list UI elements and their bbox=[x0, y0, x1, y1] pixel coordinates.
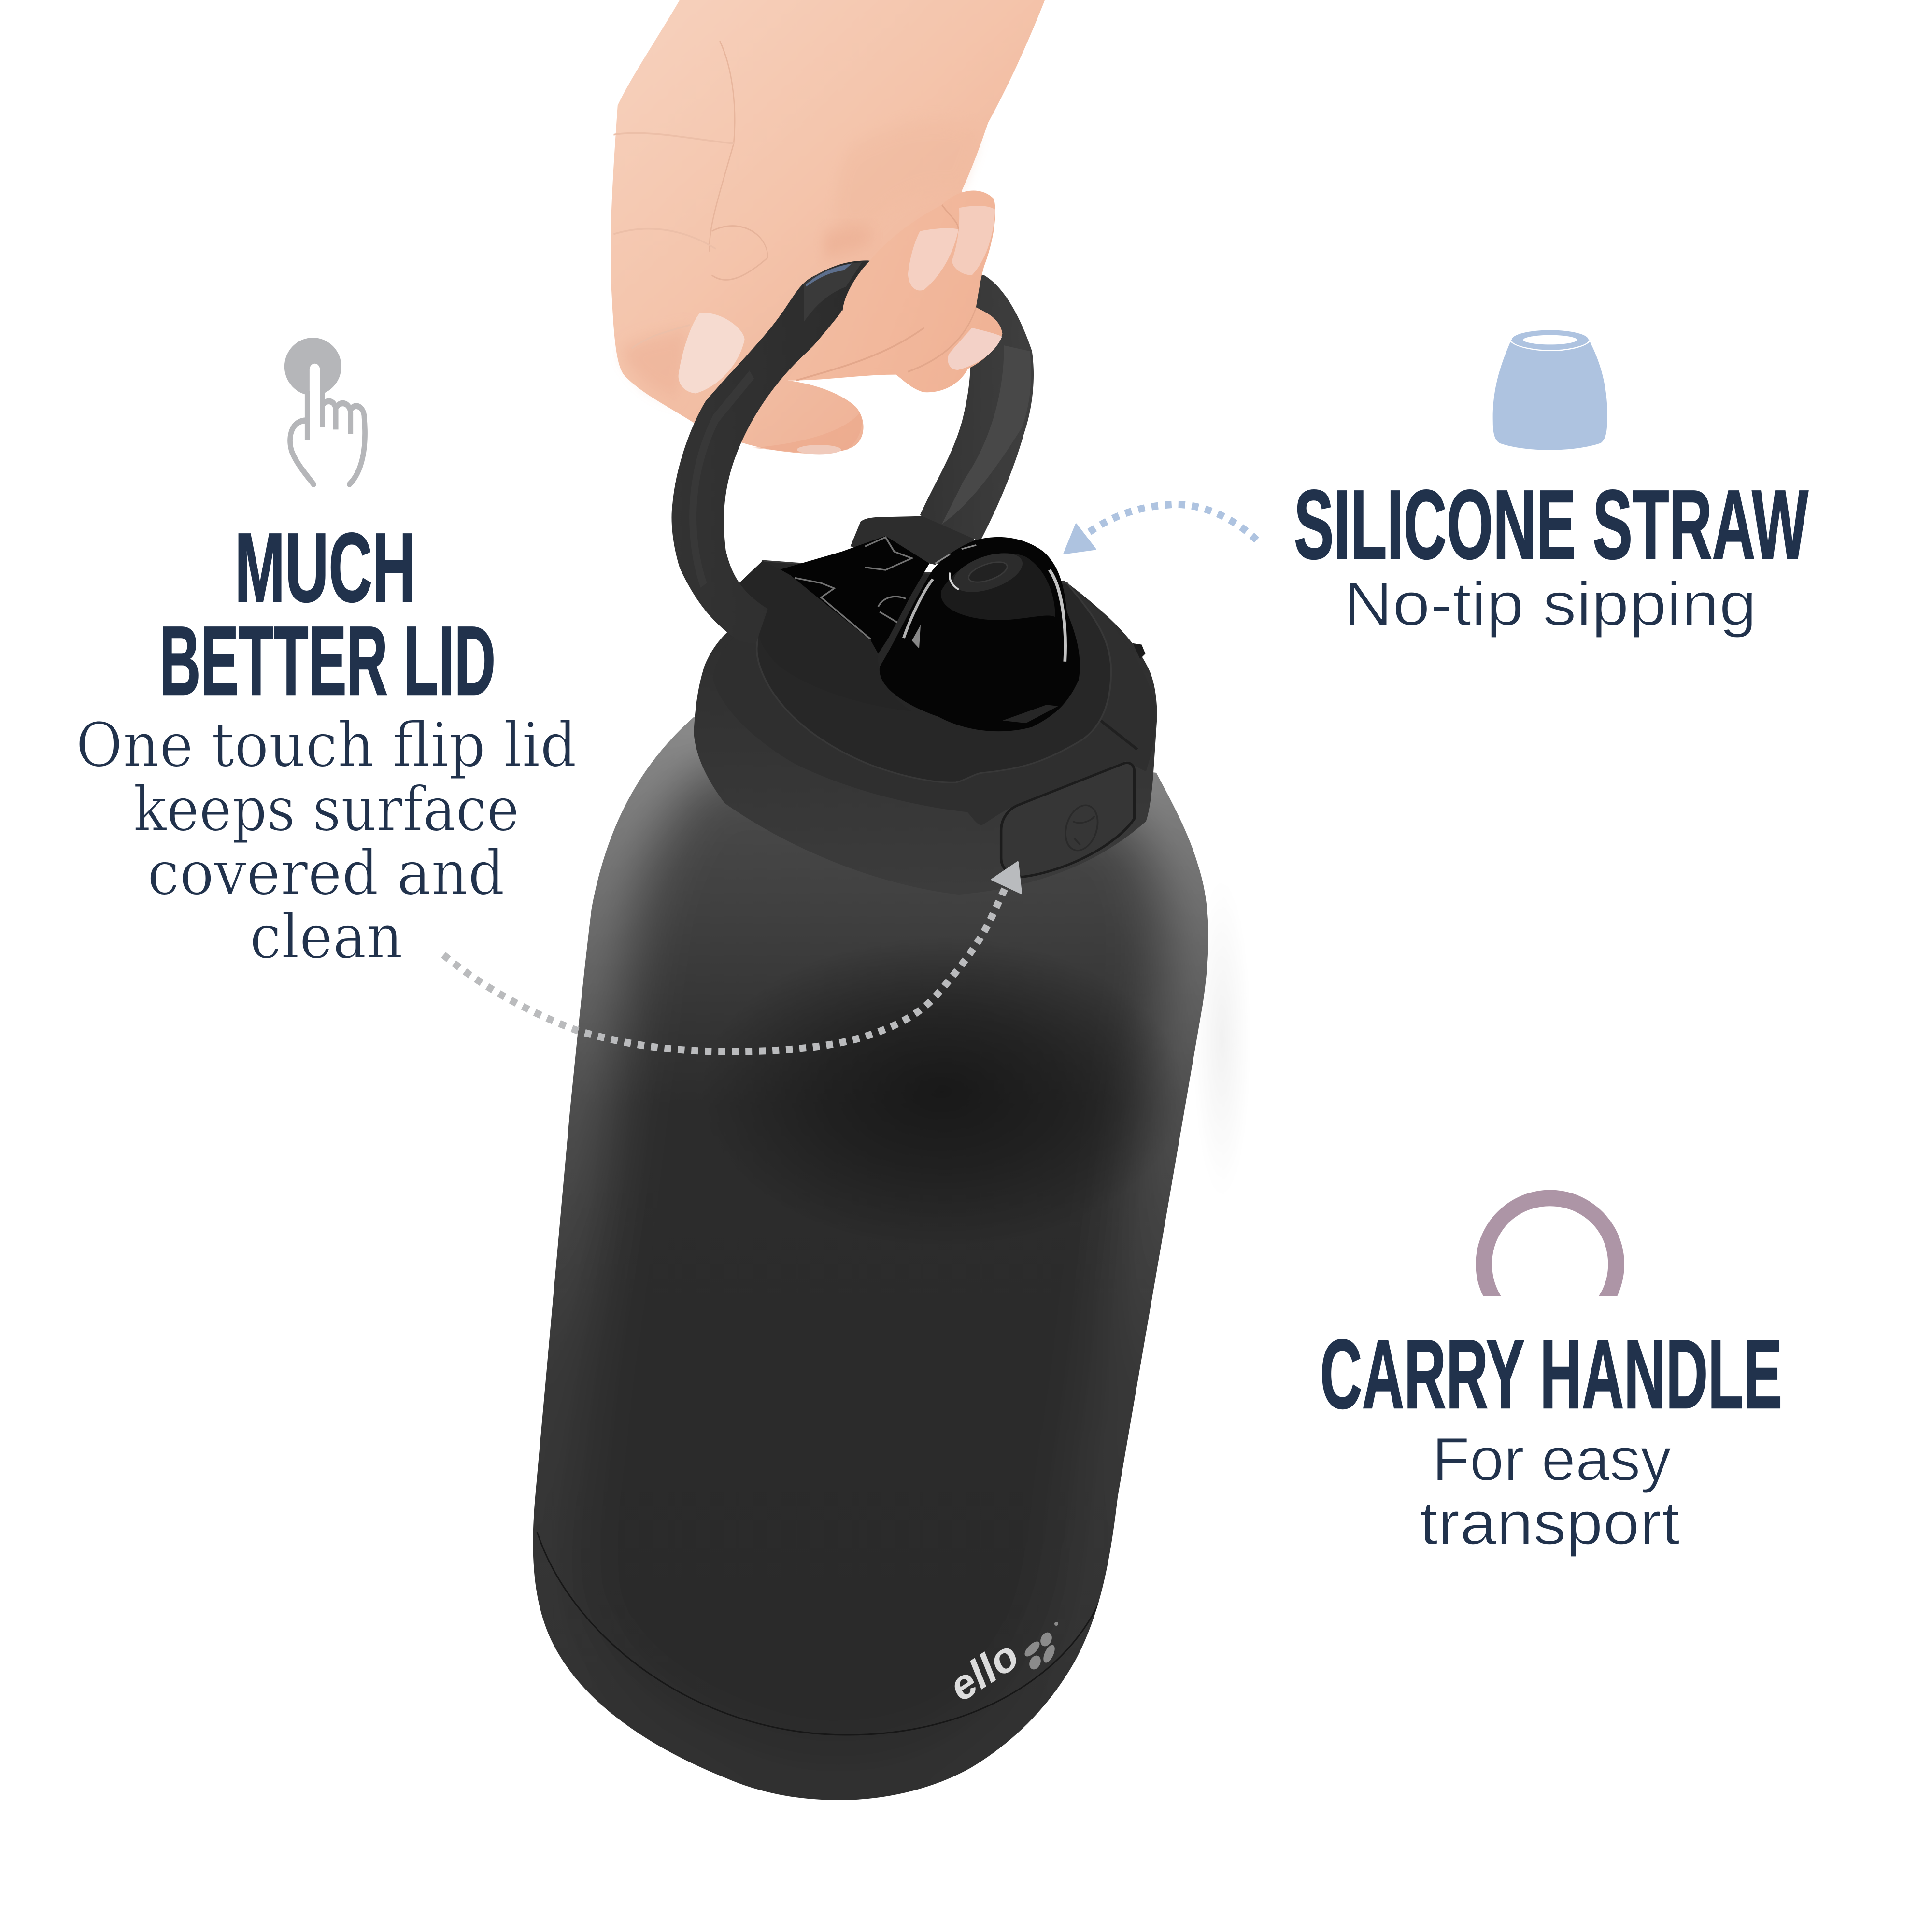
icon: touch hand bbox=[284, 338, 365, 484]
text: for easy transport bbox=[1420, 1425, 1680, 1557]
brand logo: ello bbox=[941, 1632, 1027, 1710]
rear hinge bbox=[851, 516, 976, 565]
index fingernail bbox=[908, 228, 958, 290]
heading: much better lid: MUCH bbox=[235, 513, 416, 623]
brand logo bbox=[941, 1622, 1058, 1710]
hinge plate front bbox=[739, 561, 912, 711]
raised collar ring bbox=[713, 582, 1156, 825]
dotted arrow: straw bbox=[1064, 504, 1257, 554]
hand behind the handle bbox=[611, 0, 1045, 455]
thumb nail bbox=[679, 313, 745, 393]
collar bbox=[694, 581, 1157, 895]
heading: much better lid: BETTER LID bbox=[159, 606, 496, 716]
faint halo beside bottle bbox=[1193, 879, 1251, 1198]
icon: straw tip bbox=[1493, 330, 1607, 450]
straw mouthpiece dome bbox=[880, 537, 1080, 731]
bottle body bbox=[533, 717, 1208, 1800]
heading: much better lid bbox=[159, 513, 496, 716]
inner ring bbox=[757, 561, 1111, 782]
dome inner shading bbox=[941, 554, 1055, 620]
ridge highlight bbox=[1020, 730, 1077, 756]
hand fingers and thumb nail in front of handle bbox=[679, 191, 1002, 393]
text: lid description: One touch flip lid bbox=[76, 710, 577, 781]
icon: handle arc bbox=[1476, 1190, 1624, 1296]
panel: silicone straw bbox=[1294, 330, 1808, 638]
text: lid description: clean bbox=[250, 901, 403, 972]
text: lid description bbox=[76, 710, 577, 972]
lower finger tip bbox=[752, 412, 862, 453]
collar groove bbox=[1101, 721, 1137, 749]
panel: much better lid bbox=[76, 338, 577, 972]
handle bevel bbox=[693, 375, 752, 585]
dotted arrow: lid bbox=[443, 862, 1021, 1051]
palm shading bbox=[836, 121, 980, 233]
text: lid description: covered and bbox=[147, 838, 505, 909]
ring fingernail bbox=[948, 328, 1002, 370]
panel: carry handle bbox=[1320, 1190, 1782, 1557]
thumb crease bbox=[710, 41, 735, 252]
finger creases bbox=[796, 205, 976, 381]
button logo bbox=[1061, 802, 1103, 853]
collar knob bbox=[1133, 643, 1145, 659]
text: for easy transport: For easy bbox=[1432, 1425, 1671, 1493]
open lid cavity bbox=[780, 536, 929, 654]
cavity glints bbox=[795, 537, 912, 639]
text: for easy transport: transport bbox=[1420, 1489, 1680, 1557]
carry handle loop bbox=[671, 260, 1034, 644]
dome highlights bbox=[1050, 570, 1065, 662]
middle fingernail bbox=[952, 206, 995, 275]
flip button bbox=[1001, 763, 1134, 877]
lid assembly bbox=[694, 516, 1157, 895]
text: lid description: keeps surface bbox=[133, 774, 519, 845]
text: no-tip sipping: No-tip sipping bbox=[1344, 569, 1757, 638]
